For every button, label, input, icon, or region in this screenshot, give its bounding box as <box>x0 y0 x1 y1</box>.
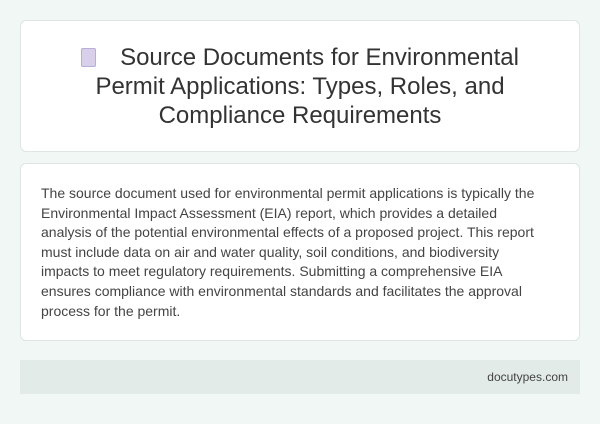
text block: The source document used for environmental permit applications is typically the Environmental Impact Assessment (EIA) report, which provides a detailed analysis of the potential environmental effects of a proposed project. This report must include data on air and water quality, soil conditions, and biodiversity impacts to meet regulatory requirements. Submitting a comprehensive EIA ensures compliance with environmental standards and facilitates the approval process for the permit. <box>41 185 534 319</box>
footer <box>20 360 580 394</box>
icon: document <box>81 48 96 67</box>
footer text: docutypes.com <box>487 370 568 384</box>
title <box>81 44 519 129</box>
panel: description <box>20 163 580 341</box>
title: Permit Applications: Types, Roles, and <box>95 73 505 100</box>
panel: title card <box>20 20 580 152</box>
title: Compliance Requirements <box>159 102 441 129</box>
title: Source Documents for Environmental <box>120 44 519 71</box>
